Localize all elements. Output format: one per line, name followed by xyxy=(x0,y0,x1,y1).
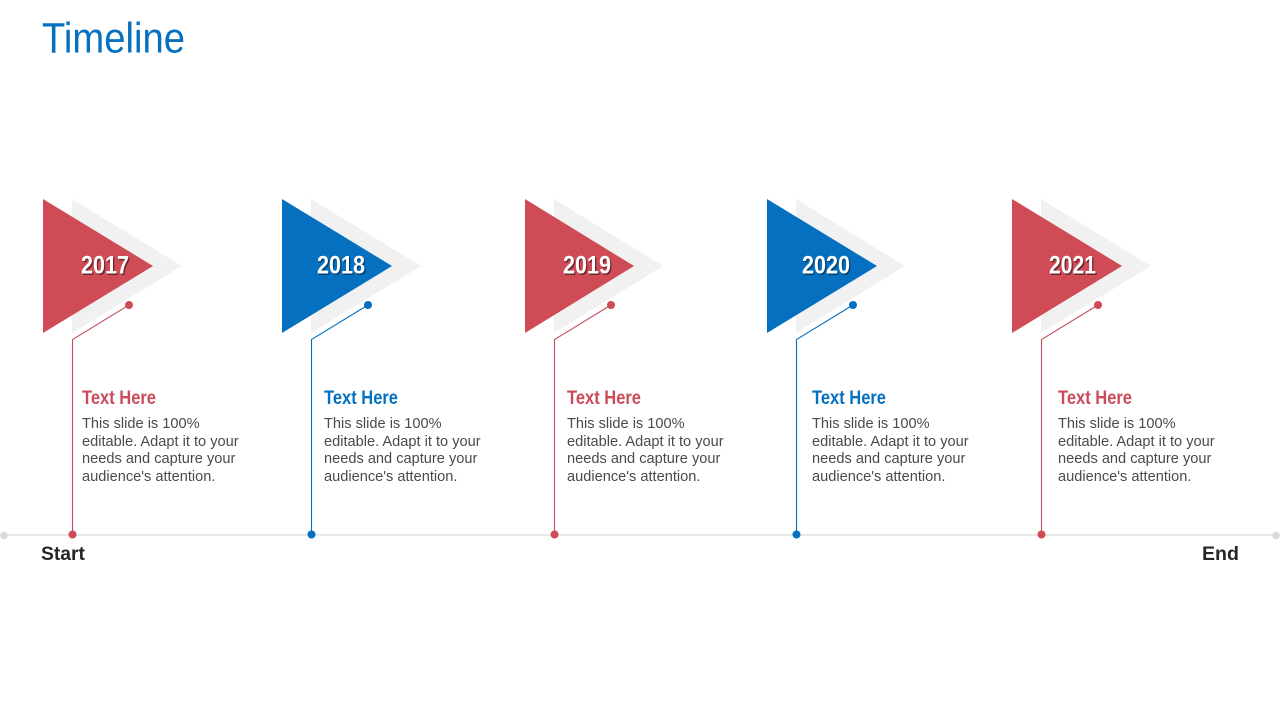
text block: 2019: needs and capture your xyxy=(567,451,720,467)
year: 2018: 2018 xyxy=(318,253,366,281)
heading: 2017: Text Here xyxy=(82,387,156,409)
year: 2021: 2021 xyxy=(1049,252,1096,280)
baseline axis xyxy=(0,532,1280,539)
label: start: Start xyxy=(41,543,85,565)
text block: 2019: audience's attention. xyxy=(567,469,700,485)
label: end: End xyxy=(1202,543,1239,565)
text block: 2021: editable. Adapt it to your xyxy=(1058,434,1215,450)
heading: 2019: Text Here xyxy=(567,387,641,409)
year: 2019: 2019 xyxy=(563,252,611,280)
year: 2020: 2020 xyxy=(802,252,850,280)
text block: 2018: audience's attention. xyxy=(324,469,457,485)
connector: 2017 xyxy=(68,301,133,538)
milestone: 2018 xyxy=(282,199,481,538)
connector: 2020 xyxy=(792,301,857,538)
icon: 2019 shadow triangle xyxy=(554,199,663,333)
text block: 2020: needs and capture your xyxy=(812,451,965,467)
text block: 2017: needs and capture your xyxy=(82,451,235,467)
text block: 2018: needs and capture your xyxy=(324,451,477,467)
icon: 2017 shadow triangle xyxy=(72,199,182,333)
year: 2021: 2021 xyxy=(1050,253,1097,281)
text block: 2019: editable. Adapt it to your xyxy=(567,434,724,450)
heading: 2018: Text Here xyxy=(324,387,398,409)
heading: 2020: Text Here xyxy=(812,387,886,409)
text block: 2017: editable. Adapt it to your xyxy=(82,434,239,450)
text block: 2020: editable. Adapt it to your xyxy=(812,434,969,450)
milestone: 2017 xyxy=(43,199,239,538)
title: Timeline xyxy=(42,14,185,62)
milestone: 2020 xyxy=(767,199,969,538)
year: 2019: 2019 xyxy=(564,253,612,281)
year: 2017: 2017 xyxy=(81,252,129,280)
year: 2020: 2020 xyxy=(803,253,851,281)
icon: 2020 triangle xyxy=(767,199,877,333)
icon: 2018 triangle xyxy=(282,199,392,333)
icon: 2018 shadow triangle xyxy=(311,199,421,333)
text block: 2021: needs and capture your xyxy=(1058,451,1211,467)
milestone: 2021 xyxy=(1012,199,1215,538)
text block: 2018: This slide is 100% xyxy=(324,416,442,432)
icon: 2019 triangle xyxy=(525,199,634,333)
text block: 2021: audience's attention. xyxy=(1058,469,1191,485)
connector: 2021 xyxy=(1038,301,1102,538)
year: 2017: 2017 xyxy=(82,253,130,281)
icon: 2017 triangle xyxy=(43,199,153,333)
text block: 2021: This slide is 100% xyxy=(1058,416,1176,432)
text block: 2020: This slide is 100% xyxy=(812,416,930,432)
milestone: 2019 xyxy=(525,199,724,538)
text block: 2019: This slide is 100% xyxy=(567,416,685,432)
icon: 2021 shadow triangle xyxy=(1041,199,1151,333)
heading: 2021: Text Here xyxy=(1058,387,1132,409)
text block: 2017: audience's attention. xyxy=(82,469,215,485)
text block: 2020: audience's attention. xyxy=(812,469,945,485)
connector: 2018 xyxy=(308,301,372,538)
connector: 2019 xyxy=(550,301,615,538)
icon: 2020 shadow triangle xyxy=(796,199,905,333)
year: 2018: 2018 xyxy=(317,252,365,280)
text block: 2017: This slide is 100% xyxy=(82,416,200,432)
text block: 2018: editable. Adapt it to your xyxy=(324,434,481,450)
icon: 2021 triangle xyxy=(1012,199,1122,333)
